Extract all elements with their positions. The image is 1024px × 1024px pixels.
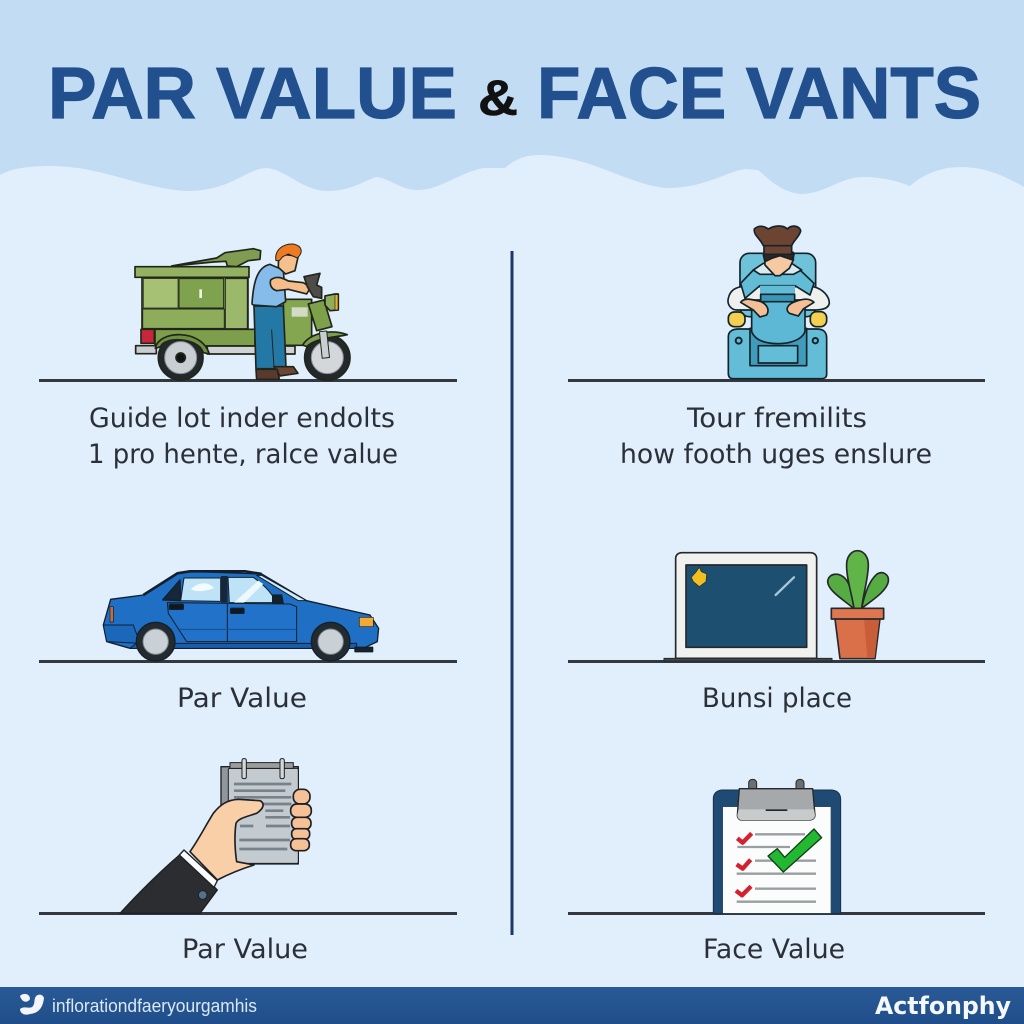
text: right caption 2: Bunsi place [702, 683, 852, 714]
header band [0, 0, 1024, 194]
text: right caption 1: Tour fremilits [686, 403, 867, 434]
footer text: inflorationdfaeryourgamhis [52, 996, 257, 1016]
front wheel [311, 622, 350, 661]
text: left caption 2: Par Value [177, 683, 307, 714]
rear wheel [136, 622, 175, 661]
icon: hand in suit holding document [120, 759, 311, 913]
icon: blue armchair with seated figure [728, 226, 829, 379]
fingers [291, 789, 311, 851]
text: right caption 1: how footh uges enslure [620, 439, 932, 470]
front wheel [305, 335, 350, 380]
palm and thumb [190, 799, 263, 880]
icon: green motor truck with mechanic [135, 244, 350, 380]
icon: blue sedan car [103, 571, 379, 661]
checklist lines [737, 834, 816, 902]
icon: clipboard with checklist [713, 779, 841, 913]
potted plant [828, 551, 888, 659]
suit sleeve [120, 854, 217, 913]
title [48, 54, 981, 134]
title: & [478, 70, 518, 126]
center divider [510, 251, 514, 935]
laptop [664, 553, 832, 661]
text: right caption 3: Face Value [703, 934, 845, 965]
text: left caption 1: 1 pro hente, ralce value [88, 439, 398, 470]
text: left caption 3: Par Value [182, 934, 308, 965]
text: left caption 1: Guide lot inder endolts [89, 403, 395, 434]
icon: footer logo [20, 994, 44, 1015]
document [221, 759, 298, 864]
text: right caption 1 [620, 403, 932, 470]
ground lines [39, 379, 985, 915]
mechanic [252, 244, 322, 379]
green check mark [768, 829, 822, 872]
title: PAR VALUE [48, 54, 457, 134]
title: FACE VANTS [537, 54, 981, 134]
footer bar [0, 987, 1024, 1024]
rear wheel [158, 335, 203, 380]
footer brand: Actfonphy [875, 992, 1011, 1020]
text: left caption 1 [88, 403, 398, 470]
red ticks [736, 833, 752, 895]
icon: laptop screen and potted plant [664, 551, 888, 661]
